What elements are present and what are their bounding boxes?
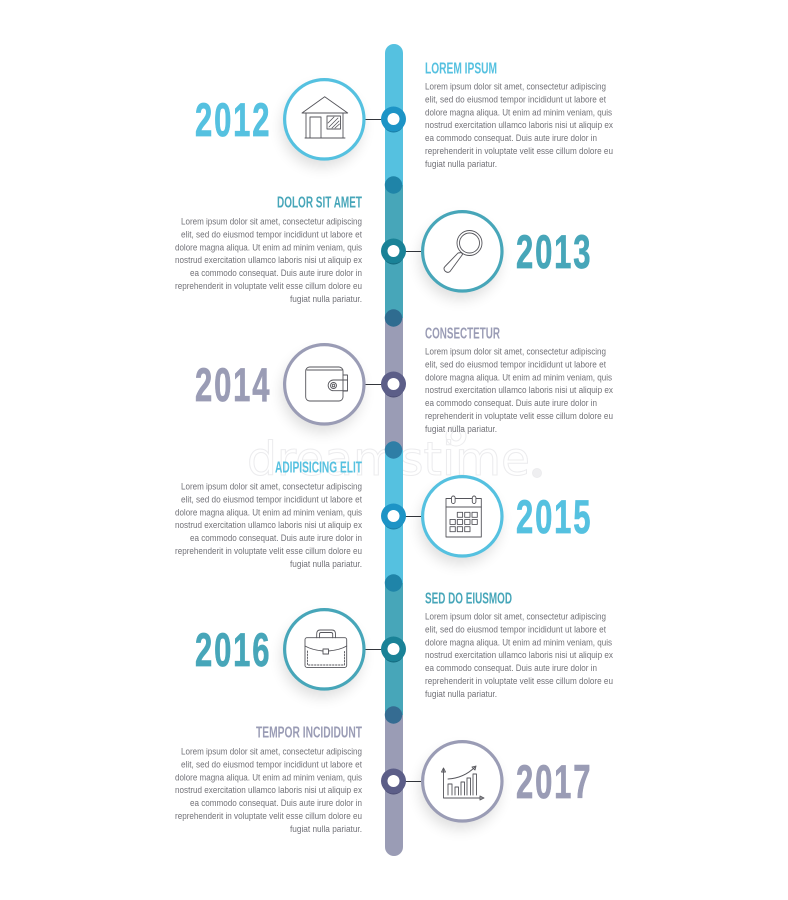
text block: adipisicing elit: ea commodo consequat. Duis aute irure dolor in (190, 533, 362, 543)
text block: lorem ipsum: ea commodo consequat. Duis aute irure dolor in (425, 133, 597, 143)
text block: tempor incididunt: dolore magna aliqua. Ut enim ad minim veniam, quis (175, 772, 362, 782)
icon circle 2016 (285, 610, 364, 689)
text block: sed do eiusmod: ea commodo consequat. Duis aute irure dolor in (425, 663, 597, 673)
text block: sed do eiusmod: nostrud exercitation ullamco laboris nisi ut aliquip ex (425, 650, 613, 660)
milestone 2014 (195, 345, 406, 432)
milestone 2016 (195, 610, 406, 697)
text block: consectetur: CONSECTETUR (425, 326, 500, 342)
year 2016: 2016 (195, 625, 271, 677)
text block: consectetur: reprehenderit in voluptate velit esse cillum dolore eu (425, 411, 613, 421)
year 2015: 2015 (516, 492, 592, 544)
text block: lorem ipsum: LOREM IPSUM (425, 60, 497, 78)
text block: lorem ipsum: Lorem ipsum dolor sit amet, consectetur adipiscing (425, 82, 606, 92)
connector 2017 (399, 780, 422, 782)
icon: growth chart (442, 766, 484, 800)
icon: briefcase (305, 630, 347, 667)
text block: lorem ipsum: nostrud exercitation ullamco laboris nisi ut aliquip ex (425, 120, 613, 130)
milestone 2015 (381, 477, 592, 564)
icon circle 2012 (285, 80, 364, 159)
node 2014 (381, 372, 406, 397)
connector 2013 (399, 250, 422, 252)
text block: adipisicing elit (175, 460, 362, 569)
text block: lorem ipsum: fugiat nulla pariatur. (425, 159, 497, 169)
text block: sed do eiusmod (425, 590, 613, 699)
text block: dolor sit amet: elit, sed do eiusmod tempor incididunt ut labore et (181, 229, 362, 239)
text block: sed do eiusmod: dolore magna aliqua. Ut enim ad minim veniam, quis (425, 637, 612, 647)
icon: wallet (306, 367, 348, 401)
text block: adipisicing elit: nostrud exercitation ullamco laboris nisi ut aliquip ex (175, 520, 362, 530)
text block: tempor incididunt: elit, sed do eiusmod tempor incididunt ut labore et (181, 759, 362, 769)
text block: sed do eiusmod: reprehenderit in voluptate velit esse cillum dolore eu (425, 676, 613, 686)
text block: tempor incididunt: fugiat nulla pariatur. (290, 824, 362, 834)
icon circle 2013 (423, 212, 502, 291)
node 2016 (381, 636, 406, 662)
text block: adipisicing elit: dolore magna aliqua. Ut enim ad minim veniam, quis (175, 507, 362, 517)
text block: tempor incididunt: Lorem ipsum dolor sit amet, consectetur adipiscing (181, 746, 362, 756)
year 2014: 2014 (195, 360, 271, 412)
text block: adipisicing elit: Lorem ipsum dolor sit amet, consectetur adipiscing (181, 482, 362, 492)
vertical timeline bar (385, 44, 403, 856)
icon circle 2017 (423, 742, 502, 821)
text block: tempor incididunt: reprehenderit in voluptate velit esse cillum dolore eu (175, 811, 362, 821)
text block: adipisicing elit: reprehenderit in voluptate velit esse cillum dolore eu (175, 546, 362, 556)
text block: consectetur: ea commodo consequat. Duis aute irure dolor in (425, 398, 597, 408)
text block: adipisicing elit: elit, sed do eiusmod tempor incididunt ut labore et (181, 494, 362, 504)
text block: tempor incididunt: ea commodo consequat. Duis aute irure dolor in (190, 798, 362, 808)
text block: dolor sit amet: reprehenderit in voluptate velit esse cillum dolore eu (175, 281, 362, 291)
text block: consectetur: fugiat nulla pariatur. (425, 424, 497, 434)
year 2012: 2012 (195, 95, 271, 147)
node 2017 (381, 768, 406, 794)
connector 2012 (365, 118, 388, 120)
milestone 2017 (381, 742, 592, 829)
connector 2015 (399, 516, 422, 518)
text block: lorem ipsum (425, 60, 613, 169)
connector 2016 (365, 648, 388, 650)
text block: lorem ipsum: reprehenderit in voluptate velit esse cillum dolore eu (425, 146, 613, 156)
text block: sed do eiusmod: fugiat nulla pariatur. (425, 689, 497, 699)
text block: consectetur: Lorem ipsum dolor sit amet, consectetur adipiscing (425, 346, 606, 356)
year 2017: 2017 (516, 757, 592, 809)
text block: adipisicing elit: fugiat nulla pariatur. (290, 559, 362, 569)
icon: magnifier (444, 230, 482, 272)
node 2015 (381, 504, 406, 529)
text block: dolor sit amet: DOLOR SIT AMET (277, 194, 362, 212)
text block: tempor incididunt (175, 724, 362, 834)
milestone 2012 (195, 80, 406, 167)
icon circle 2015 (423, 477, 502, 556)
text block: sed do eiusmod: SED DO EIUSMOD (425, 590, 512, 608)
text block: consectetur: elit, sed do eiusmod tempor incididunt ut labore et (425, 359, 606, 369)
text block: consectetur: dolore magna aliqua. Ut enim ad minim veniam, quis (425, 372, 612, 382)
icon: calendar (446, 496, 481, 537)
text block: tempor incididunt: nostrud exercitation ullamco laboris nisi ut aliquip ex (175, 785, 362, 795)
text block: dolor sit amet: nostrud exercitation ullamco laboris nisi ut aliquip ex (175, 255, 362, 265)
node 2012 (381, 106, 406, 132)
connector 2014 (365, 384, 388, 386)
text block: tempor incididunt: TEMPOR INCIDIDUNT (256, 724, 362, 742)
text block: dolor sit amet (175, 194, 362, 304)
node 2013 (381, 238, 406, 264)
watermark: dreamstime (247, 432, 530, 486)
text block: sed do eiusmod: Lorem ipsum dolor sit amet, consectetur adipiscing (425, 612, 606, 622)
text block: dolor sit amet: Lorem ipsum dolor sit amet, consectetur adipiscing (181, 216, 362, 226)
year 2013: 2013 (516, 227, 592, 279)
text block: consectetur: nostrud exercitation ullamco laboris nisi ut aliquip ex (425, 385, 613, 395)
text block: sed do eiusmod: elit, sed do eiusmod tempor incididunt ut labore et (425, 624, 606, 634)
text block: dolor sit amet: ea commodo consequat. Duis aute irure dolor in (190, 268, 362, 278)
text block: dolor sit amet: fugiat nulla pariatur. (290, 294, 362, 304)
icon circle 2014 (285, 345, 364, 424)
text block: lorem ipsum: dolore magna aliqua. Ut enim ad minim veniam, quis (425, 107, 612, 117)
icon: house (302, 97, 348, 138)
text block: lorem ipsum: elit, sed do eiusmod tempor incididunt ut labore et (425, 94, 606, 104)
text block: consectetur (425, 326, 613, 434)
milestone 2013 (381, 212, 592, 299)
text block: dolor sit amet: dolore magna aliqua. Ut enim ad minim veniam, quis (175, 242, 362, 252)
text block: adipisicing elit: ADIPISICING ELIT (275, 460, 362, 476)
bar joints (385, 176, 402, 724)
